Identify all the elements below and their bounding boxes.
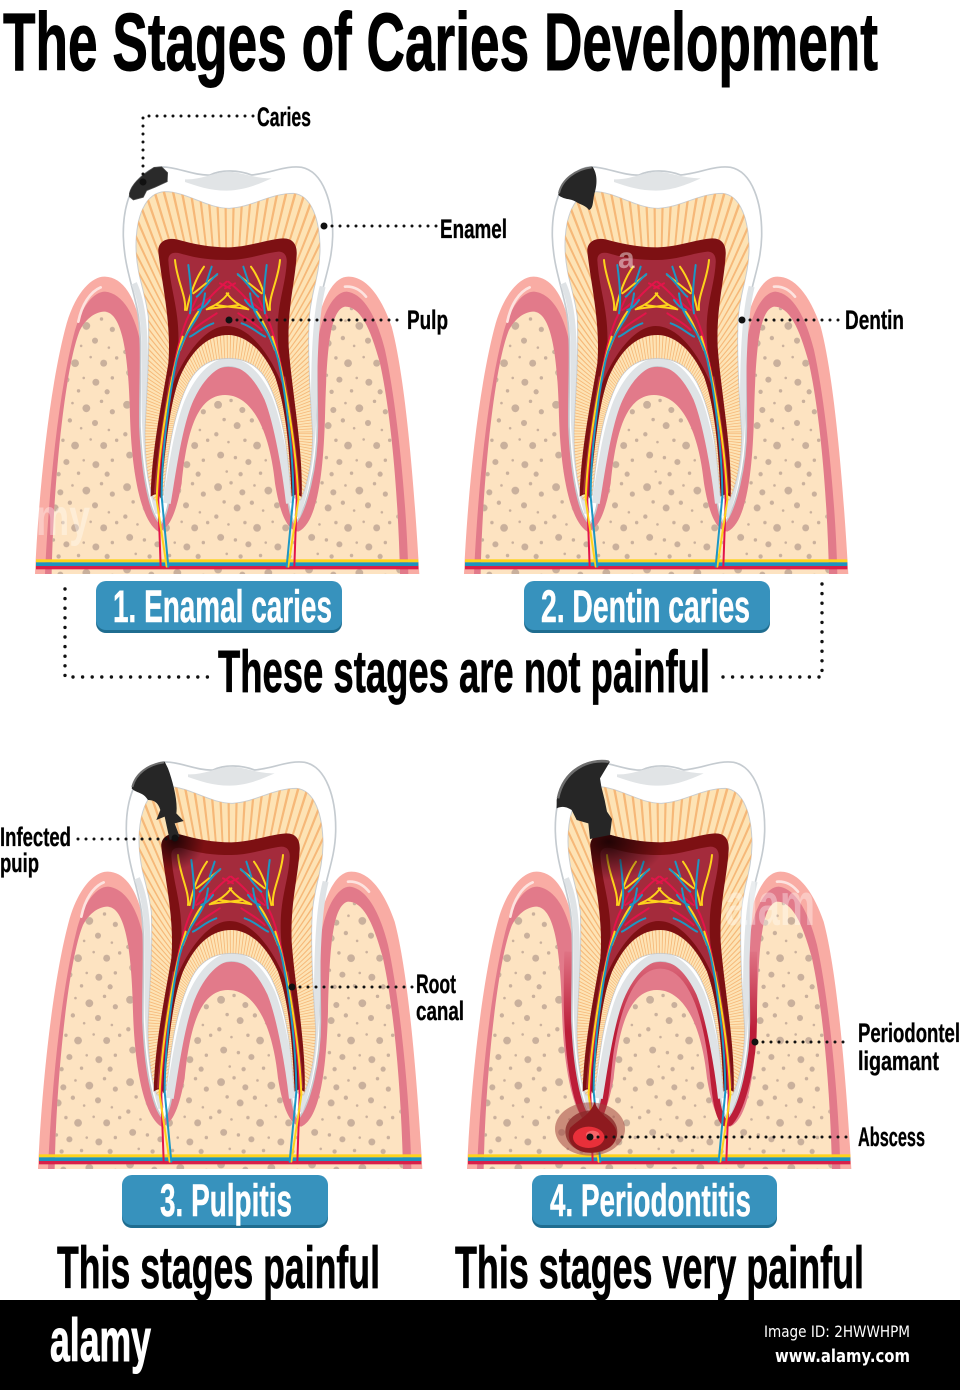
caption: stage 3 pain: This stages painful (57, 1235, 380, 1301)
footer bar (0, 1300, 960, 1390)
illustration: tooth with periodontitis and abscess (467, 761, 851, 1178)
label: pulp (226, 305, 448, 335)
watermark: a (618, 242, 635, 275)
footer image id: Image ID: 2HWWHPM (764, 1322, 910, 1341)
label: infected pulp: Infected (0, 822, 71, 852)
label: root canal (288, 969, 464, 1026)
panel: stage 1 enamel caries (35, 102, 507, 633)
badge: stage 4 (532, 1175, 777, 1228)
label: infected pulp: puip (0, 848, 39, 878)
footer logo: alamy (50, 1307, 151, 1374)
label: abscess (586, 1122, 925, 1152)
badge: stage 2: 2. Dentin caries (541, 581, 750, 632)
label: periodontal ligament (752, 1018, 960, 1076)
watermark: alam (725, 871, 815, 938)
callout: not painful with bracket (65, 584, 822, 705)
badge: stage 4: 4. Periodontitis (550, 1175, 751, 1226)
badge: stage 3 (122, 1175, 328, 1228)
illustration: tooth with enamel caries (35, 167, 419, 583)
label: root canal: canal (416, 996, 464, 1026)
label: caries: Caries (257, 102, 311, 132)
badge: stage 1 (96, 581, 342, 633)
label: enamel (320, 214, 507, 244)
footer url: www.alamy.com (775, 1346, 910, 1367)
label: infected pulp (0, 822, 178, 878)
badge: stage 3: 3. Pulpitis (160, 1175, 292, 1226)
label: dentin: Dentin (845, 305, 904, 335)
badge: stage 1: 1. Enamal caries (113, 581, 332, 632)
panel: stage 4 periodontitis (455, 761, 960, 1301)
watermark: my (36, 489, 90, 547)
label: dentin (738, 305, 904, 335)
abscess (555, 1102, 625, 1156)
label: caries (140, 102, 311, 186)
label: enamel: Enamel (440, 214, 507, 244)
panel: stage 2 dentin caries (464, 167, 904, 633)
illustration: tooth with pulpitis (38, 762, 422, 1178)
badge: stage 2 (524, 581, 770, 633)
panel: stage 3 pulpitis (0, 762, 464, 1301)
label: pulp: Pulp (407, 305, 448, 335)
label: root canal: Root (416, 969, 456, 999)
illustration: tooth with dentin caries (464, 167, 848, 583)
